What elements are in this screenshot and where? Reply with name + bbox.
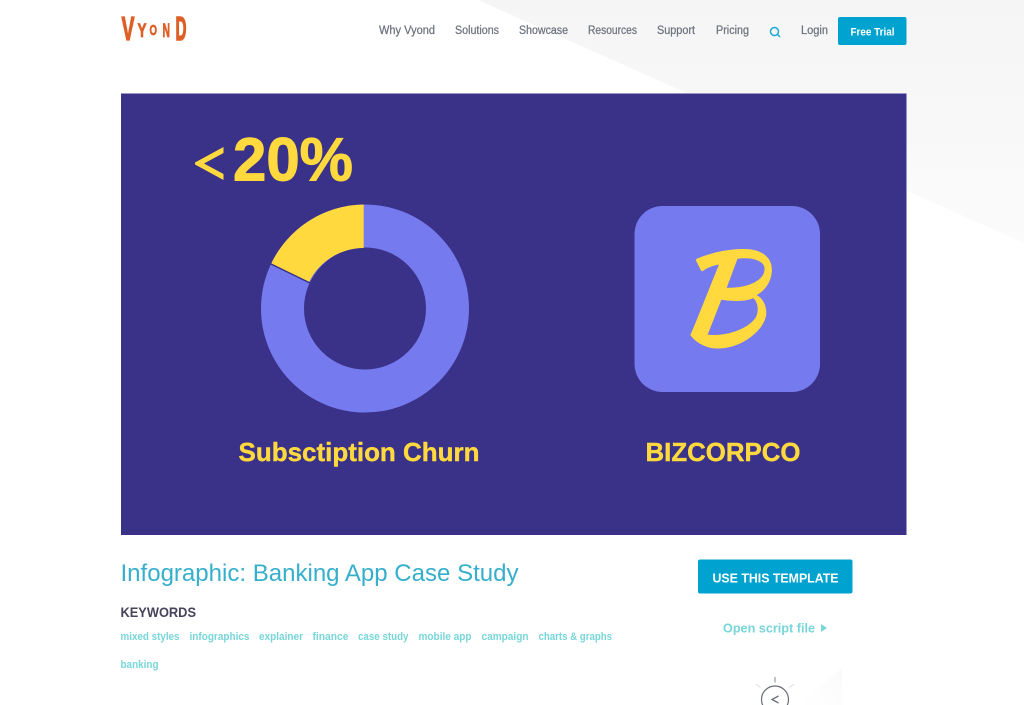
title: Infographic: Banking App Case Study xyxy=(120,560,518,587)
icon: BizCorpCo app tile xyxy=(634,206,820,392)
keyword tags: case study xyxy=(358,631,409,643)
label: subscription churn: Subsctiption Churn xyxy=(238,437,480,467)
button: use this template: USE THIS TEMPLATE xyxy=(712,570,839,586)
heading: less than 20 percent: 20% xyxy=(233,126,353,194)
button: free trial: Free Trial xyxy=(850,26,894,38)
navigation menu: Solutions xyxy=(455,25,499,37)
navigation menu: Support xyxy=(657,25,696,37)
keyword tags xyxy=(120,631,612,671)
navigation menu: Login xyxy=(801,25,828,37)
icon: search xyxy=(770,28,780,37)
keyword tags: campaign xyxy=(482,631,529,643)
navigation menu: Pricing xyxy=(716,25,749,37)
button: use this template xyxy=(698,560,852,594)
navigation menu: Why Vyond xyxy=(379,25,435,37)
logo: Vyond: Y xyxy=(138,21,147,42)
donut chart: subscription churn xyxy=(270,204,448,391)
logo: Vyond: O xyxy=(150,22,157,39)
logo: Vyond: V xyxy=(122,10,134,47)
keyword tags: mobile app xyxy=(418,631,472,643)
icon: share badge xyxy=(756,677,794,705)
keywords heading: KEYWORDS xyxy=(120,604,196,620)
navigation menu: Resources xyxy=(588,25,637,37)
text: D xyxy=(176,10,186,47)
keyword tags: infographics xyxy=(190,631,250,643)
keyword tags: explainer xyxy=(259,631,304,643)
keyword tags: mixed styles xyxy=(120,631,180,643)
label: BizCorpCo: BIZCORPCO xyxy=(646,437,800,467)
link: open script file: Open script file xyxy=(723,620,815,636)
logo: Vyond xyxy=(122,10,186,47)
navigation menu: Showcase xyxy=(519,25,568,37)
button: free trial xyxy=(838,17,906,45)
keyword tags: charts & graphs xyxy=(538,631,612,643)
keyword tags: banking xyxy=(120,659,158,671)
navigation menu xyxy=(379,25,828,37)
keyword tags: finance xyxy=(312,631,348,643)
panel: video still xyxy=(121,94,906,535)
logo: Vyond: N xyxy=(162,21,170,42)
